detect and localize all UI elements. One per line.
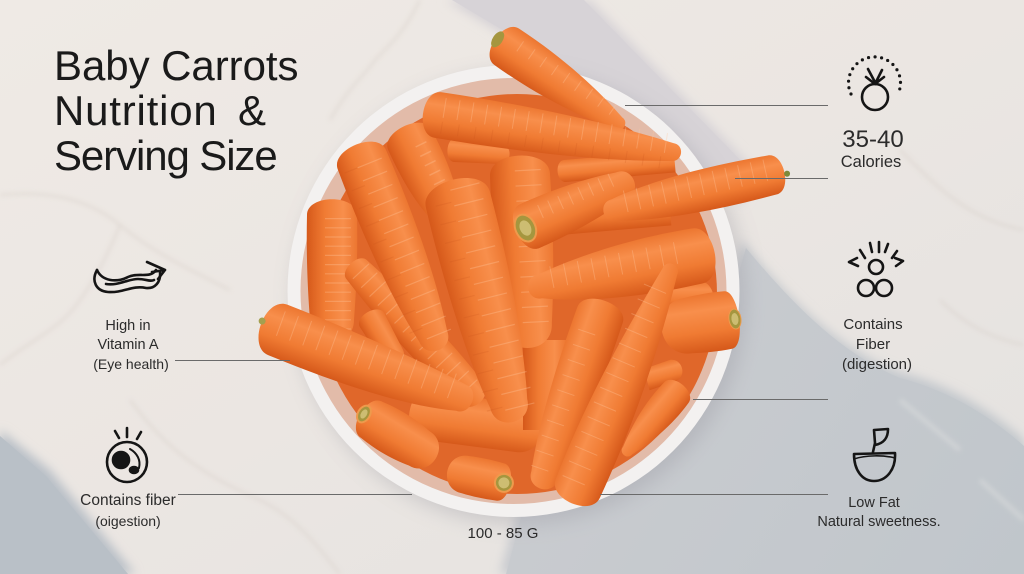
icon: bowl with leaf xyxy=(854,429,895,481)
carrot: big centre xyxy=(421,172,545,430)
carrot: bottom behind xyxy=(517,293,628,496)
icon: fiber circles xyxy=(849,242,903,296)
calories text xyxy=(841,126,904,171)
bowl xyxy=(288,65,746,524)
carrot: back lower xyxy=(406,388,546,456)
carrot: behind upper left xyxy=(382,116,475,239)
shadow: bottom left xyxy=(0,430,135,574)
carrot: behind centre low xyxy=(523,340,567,430)
carrot: bottom left xyxy=(347,392,448,478)
title: Serving Size xyxy=(54,132,277,179)
contains fiber text (right): (digestion) xyxy=(842,356,912,373)
title: Baby Carrots xyxy=(54,42,298,89)
carrot: tall diagonal bottom xyxy=(549,255,696,513)
connector lines xyxy=(175,106,828,494)
carrot: right long xyxy=(599,150,794,233)
contains fiber text (right) xyxy=(842,316,912,373)
carrot: back lower right xyxy=(643,357,685,390)
icon: calories ring xyxy=(848,57,900,110)
carrot: small lower right xyxy=(611,374,695,466)
vitamin A text xyxy=(93,318,169,372)
carrot: long lower left xyxy=(248,297,482,427)
carrot: left vertical xyxy=(307,199,357,342)
contains fiber text (left): Contains fiber xyxy=(80,492,176,509)
carrot: large left diagonal xyxy=(331,135,463,360)
light streaks on shadow xyxy=(900,400,1024,520)
contains fiber text (right): Contains xyxy=(843,316,903,333)
carrot: back upper right xyxy=(557,150,676,183)
vitamin A text: (Eye health) xyxy=(93,356,169,372)
carrot: small left lower xyxy=(355,305,410,371)
shadow: top diagonal xyxy=(445,0,760,205)
low fat text xyxy=(817,495,941,530)
vitamin A text: High in xyxy=(105,318,151,334)
calories text: 35-40 xyxy=(842,126,904,153)
vitamin A text: Vitamin A xyxy=(98,337,159,353)
contains fiber text (left) xyxy=(80,492,176,529)
carrot: mid right xyxy=(523,225,720,317)
title: Nutrition & xyxy=(54,87,267,134)
low fat text: Low Fat xyxy=(848,495,900,511)
carrot: long horizontal xyxy=(420,90,685,176)
contains fiber text (left): (oigestion) xyxy=(95,513,161,529)
carrots in bowl xyxy=(248,19,794,513)
carrot: back upper xyxy=(446,137,511,167)
carrot: bottom stub xyxy=(443,452,517,504)
contains fiber text (right): Fiber xyxy=(856,336,890,353)
low fat text: Natural sweetness. xyxy=(817,514,941,530)
calories text: Calories xyxy=(841,153,901,171)
serving size text: 100 - 85 G xyxy=(468,525,538,542)
carrot: end-on short xyxy=(507,158,643,254)
carrot: top carrot xyxy=(480,19,636,145)
icon: vitamin A wave xyxy=(94,262,165,292)
carrot: diagonal small xyxy=(337,251,494,415)
carrot: back centre right xyxy=(551,187,671,236)
title xyxy=(54,42,298,179)
carrot: back right xyxy=(670,281,714,311)
carrot: right stub xyxy=(658,289,745,358)
shadow: lower right xyxy=(500,240,1024,574)
icon: eye xyxy=(107,428,147,482)
carrot: behind centre vertical xyxy=(489,154,559,350)
